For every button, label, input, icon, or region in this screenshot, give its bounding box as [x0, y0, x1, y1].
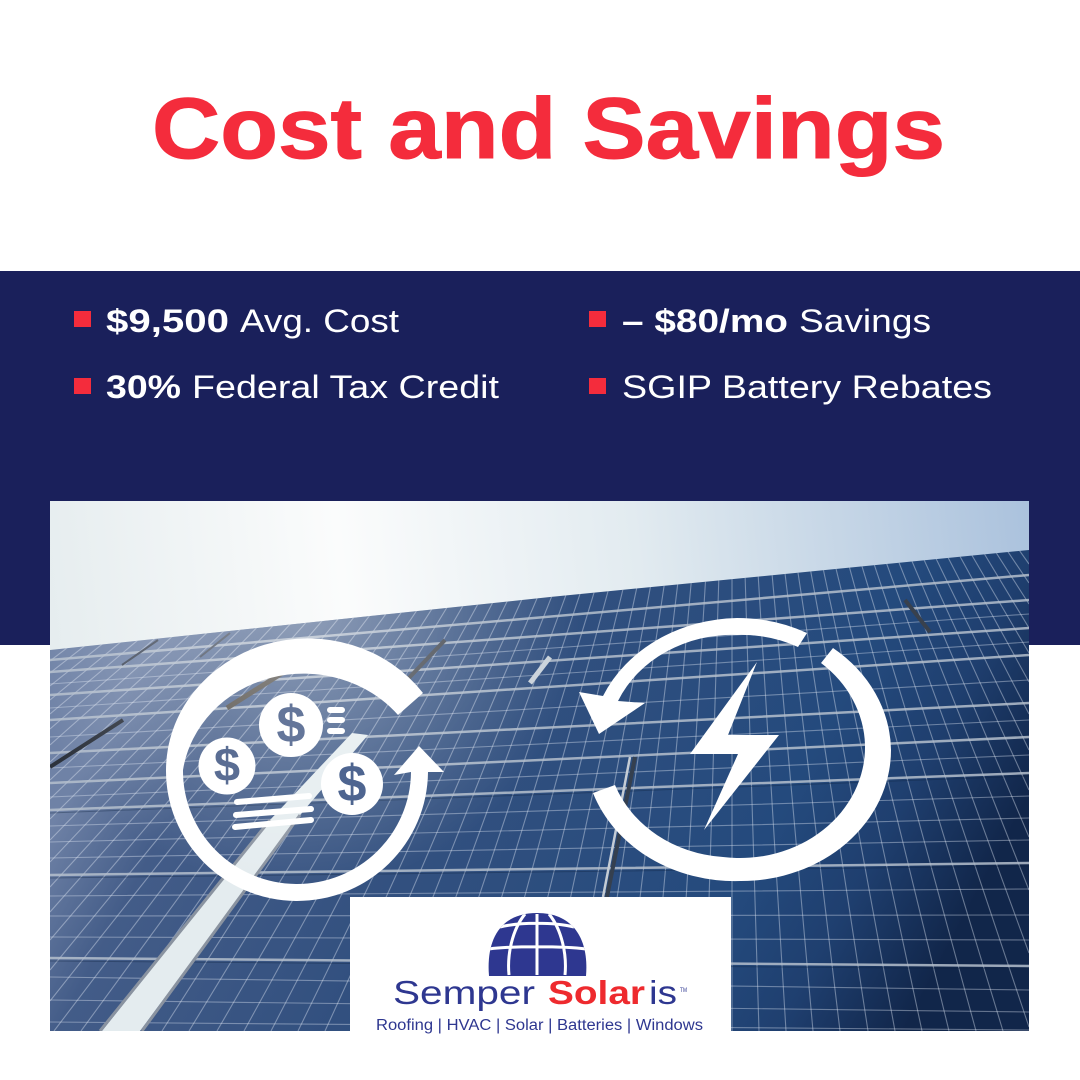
bullet: average cost: Avg. Cost [240, 303, 399, 339]
logo: tagline: Roofing | HVAC | Solar | Batteries | Windows [376, 1017, 703, 1034]
bullet: battery rebates: SGIP Battery Rebates [622, 369, 992, 405]
logo: wordmark: is [649, 974, 677, 1011]
coin: top: $ [277, 696, 306, 754]
navy band [0, 271, 1080, 645]
motion lines [235, 710, 342, 827]
icon: energy cycle [579, 618, 891, 881]
icon: money cycle [166, 638, 444, 901]
coin: left [198, 738, 256, 794]
bullet: monthly savings [589, 303, 931, 339]
bullet: average cost [74, 303, 399, 339]
logo: wordmark [393, 974, 687, 1011]
logo: wordmark: TM [680, 988, 687, 994]
bullet: federal tax credit [74, 369, 499, 405]
bullet: monthly savings: Savings [799, 303, 931, 339]
bullet list [74, 303, 992, 405]
title: Cost and Savings [152, 81, 945, 177]
coin: right: $ [338, 755, 367, 813]
coin: left: $ [214, 738, 240, 791]
arc with arrow: top and left [579, 618, 807, 734]
logo box [350, 897, 731, 1034]
bullet: monthly savings: – $80/mo [622, 303, 788, 339]
arc: right and bottom [593, 648, 891, 881]
coin: top [259, 693, 323, 757]
bullet: average cost: $9,500 [106, 303, 229, 339]
logo: dome [488, 913, 587, 976]
logo: wordmark: Solar [548, 974, 645, 1011]
bullet: federal tax credit: Federal Tax Credit [192, 369, 499, 405]
lightning bolt [690, 662, 779, 830]
bullet: federal tax credit: 30% [106, 369, 181, 405]
coin: right [321, 753, 383, 815]
circular arrow around coins [166, 638, 444, 901]
solar panel photo [50, 501, 1029, 1031]
logo: wordmark: Semper [393, 974, 535, 1011]
